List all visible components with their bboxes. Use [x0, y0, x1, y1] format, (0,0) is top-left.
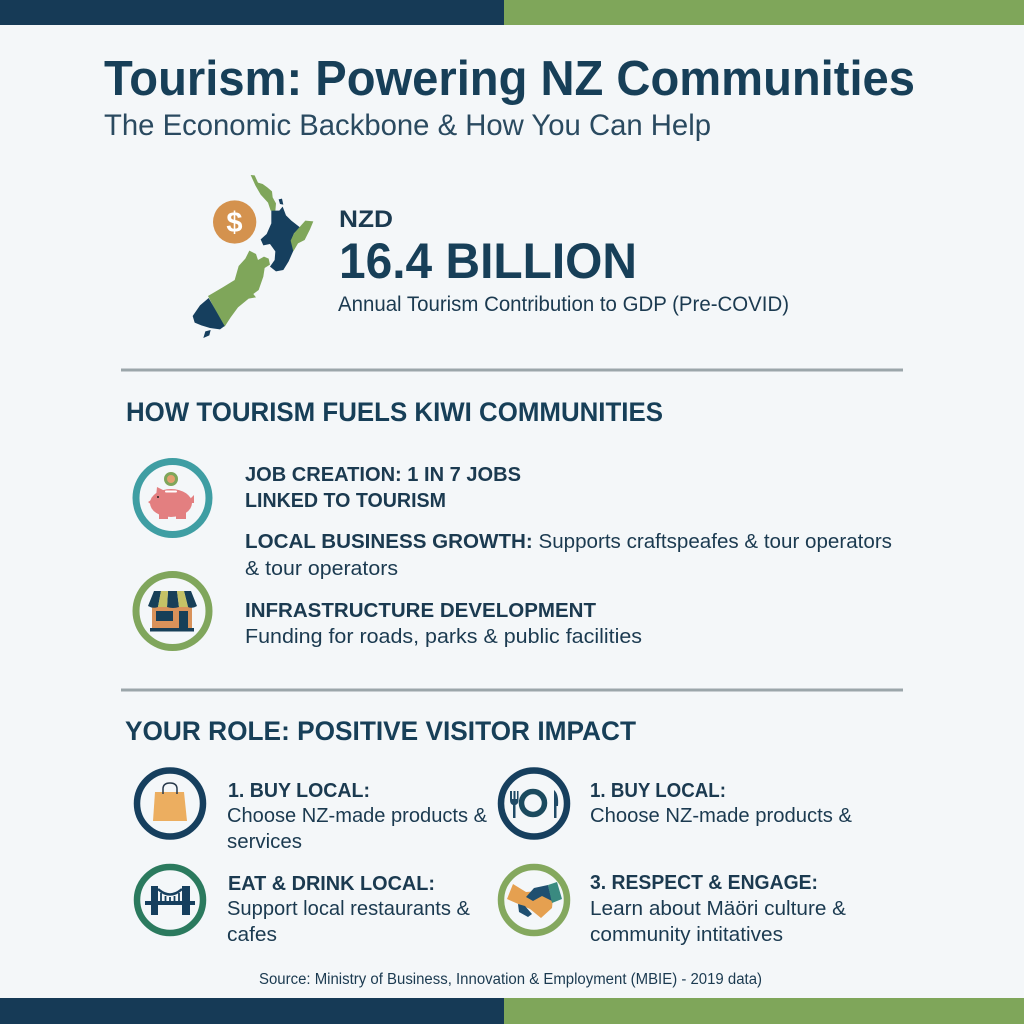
- icon: handshake: [501, 867, 567, 933]
- respect and engage text: 3. RESPECT & ENGAGE:: [590, 872, 818, 894]
- buy local text, right: 1. BUY LOCAL:: [590, 780, 726, 802]
- subtitle: The Economic Backbone & How You Can Help: [104, 109, 711, 142]
- jobs text: JOB CREATION: 1 IN 7 JOBS: [245, 463, 521, 486]
- local business text: & tour operators: [245, 557, 398, 580]
- buy local text, right: [590, 780, 853, 827]
- icon: storefront: [136, 574, 209, 648]
- buy local text: [227, 780, 488, 853]
- eat and drink text: cafes: [227, 924, 277, 946]
- top colour band: [0, 0, 1024, 25]
- buy local text, right: Choose NZ-made products &: [590, 805, 853, 827]
- icon: bridge: [137, 867, 203, 933]
- local business text: LOCAL BUSINESS GROWTH: Supports craftspeafes & tour operators: [245, 530, 892, 553]
- respect and engage text: community intitatives: [590, 924, 783, 946]
- buy local text: services: [227, 831, 302, 853]
- headline figure: 16.4 BILLION: [339, 233, 637, 289]
- icon: shopping bag: [137, 770, 203, 836]
- title: Tourism: Powering NZ Communities: [104, 52, 915, 106]
- figure caption: Annual Tourism Contribution to GDP (Pre-COVID): [338, 293, 789, 316]
- icon: New Zealand map with dollar coin: [193, 175, 313, 338]
- dollar sign: $: [226, 207, 243, 239]
- local business text: [245, 530, 892, 580]
- bottom colour band: [0, 998, 1024, 1024]
- NZD label: NZD: [339, 206, 393, 233]
- infrastructure text: [245, 599, 642, 648]
- jobs text: LINKED TO TOURISM: [245, 489, 446, 512]
- respect and engage text: [590, 872, 847, 946]
- infrastructure text: Funding for roads, parks & public facilities: [245, 625, 642, 648]
- heading: how tourism fuels: HOW TOURISM FUELS KIWI COMMUNITIES: [126, 397, 663, 427]
- infrastructure text: INFRASTRUCTURE DEVELOPMENT: [245, 599, 596, 622]
- eat and drink text: Support local restaurants &: [227, 898, 471, 920]
- source note: Source: Ministry of Business, Innovation & Employment (MBIE) - 2019 data): [259, 971, 762, 988]
- jobs text: [245, 463, 521, 512]
- eat and drink text: EAT & DRINK LOCAL:: [228, 873, 435, 895]
- icon: piggy bank: [136, 462, 209, 534]
- eat and drink text: [227, 873, 471, 946]
- buy local text: 1. BUY LOCAL:: [228, 780, 370, 802]
- buy local text: Choose NZ-made products &: [227, 805, 488, 827]
- icon: plate and cutlery: [501, 770, 567, 836]
- respect and engage text: Learn about Mäöri culture &: [590, 898, 847, 920]
- heading: your role: YOUR ROLE: POSITIVE VISITOR IMPACT: [125, 716, 636, 746]
